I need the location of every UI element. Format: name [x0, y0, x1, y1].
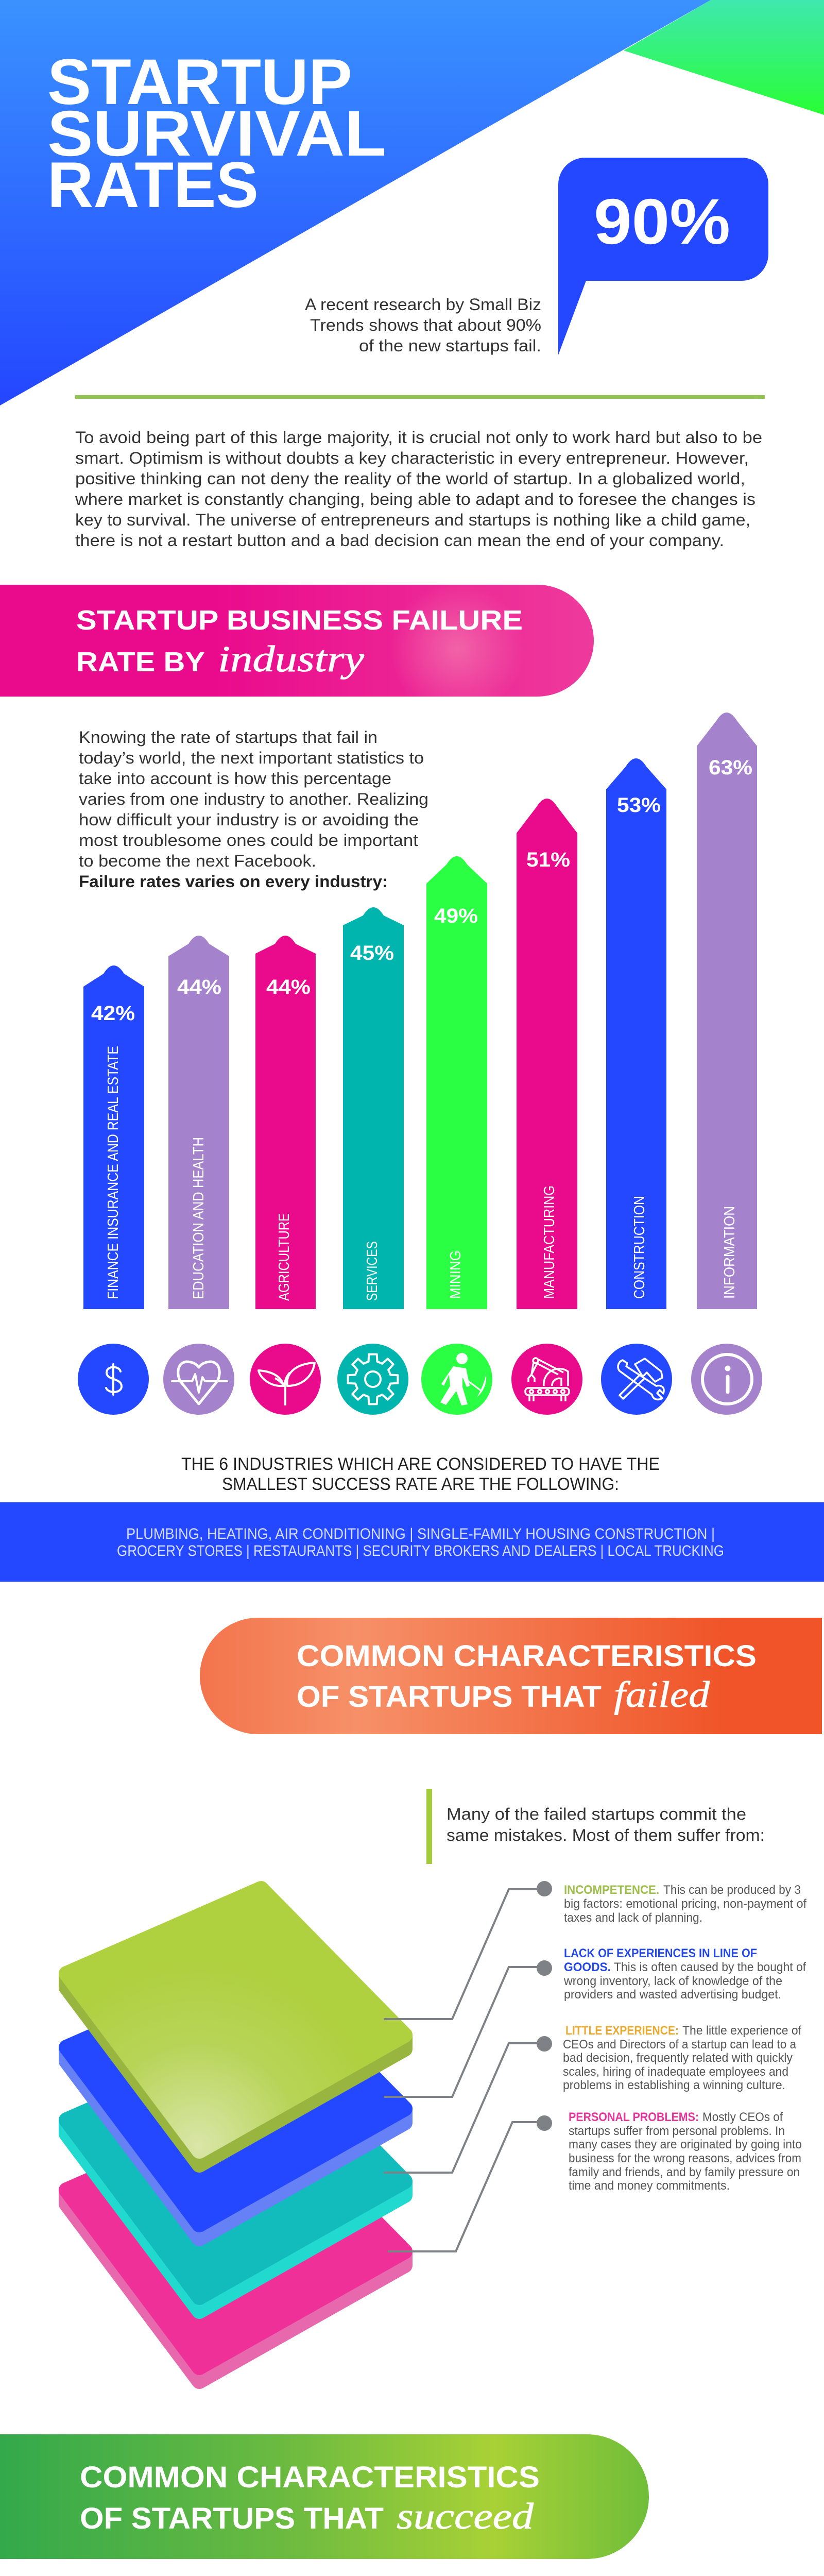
icon: plant: [250, 1344, 321, 1415]
text block: personal problems: time and money commitments.: [569, 2179, 730, 2193]
text block: little experience: bad decision, frequently related with quickly: [563, 2051, 793, 2065]
chart: stacked layers: [66, 1889, 405, 2381]
bar: education and health 44%: 44%: [177, 976, 221, 998]
bar: education and health 44%: EDUCATION AND HEALTH: [191, 1137, 207, 1299]
bar: information 63%: [697, 713, 757, 1309]
callout: 90% speech bubble: 90%: [594, 186, 730, 258]
text block: personal problems: many cases they are originated by going into: [569, 2138, 802, 2151]
panel: industry strip: [0, 1502, 824, 1582]
text block: lack of experience: This is often caused by the bought of: [614, 1960, 806, 1974]
bar: manufacturing 51%: 51%: [526, 849, 570, 871]
text block: failed intro: [426, 1789, 765, 1864]
bar: information 63%: INFORMATION: [722, 1206, 738, 1299]
text block: little experience: LITTLE EXPERIENCE:: [565, 2024, 679, 2038]
bar: finance 42%: FINANCE INSURANCE AND REAL ESTATE: [105, 1046, 122, 1299]
bar: agriculture 44%: AGRICULTURE: [276, 1213, 293, 1301]
bar: construction 53%: 53%: [617, 794, 661, 817]
text block: industry intro: take into account is how this percentage: [79, 769, 391, 788]
text block: incompetence: This can be produced by 3: [663, 1883, 801, 1897]
intro paragraph: there is not a restart button and a bad decision can mean the end of your company.: [75, 531, 724, 550]
layer: teal: [66, 2035, 405, 2311]
bar: mining 49%: 49%: [434, 905, 478, 927]
text block: incompetence: INCOMPETENCE.: [564, 1883, 659, 1897]
text block: lack of experience: [563, 1946, 806, 2002]
icon row: [78, 1344, 762, 1415]
intro paragraph: To avoid being part of this large majority, it is crucial not only to work hard but also to be: [75, 428, 762, 447]
panel: industry strip: PLUMBING, HEATING, AIR CONDITIONING | SINGLE-FAMILY HOUSING CONSTRUCTION |: [126, 1526, 715, 1543]
icon: info: [691, 1344, 762, 1415]
text block: lack of experience: providers and wasted advertising budget.: [564, 1988, 781, 2002]
bar: mining 49%: MINING: [448, 1250, 464, 1299]
layer: pink: [66, 2105, 405, 2381]
callout text: Trends shows that about 90%: [310, 316, 541, 334]
bar: services 45%: SERVICES: [364, 1241, 381, 1301]
callout text: [305, 295, 541, 355]
intro paragraph: key to survival. The universe of entrepreneurs and startups is nothing like a child game,: [75, 511, 750, 529]
text block: personal problems: business for the wrong reasons, advices from: [569, 2151, 801, 2165]
bar: mining 49%: [426, 856, 487, 1309]
intro paragraph: where market is constantly changing, being able to adapt and to foresee the changes is: [75, 490, 756, 509]
heading: failure rate by industry: [0, 585, 594, 697]
text block: personal problems: Mostly CEOs of: [702, 2110, 783, 2124]
text block: little experience: [563, 2024, 801, 2092]
heading: failure rate by industry: industry: [218, 638, 364, 680]
bar: information 63%: 63%: [709, 756, 752, 779]
panel: industry strip: GROCERY STORES | RESTAURANTS | SECURITY BROKERS AND DEALERS | LOCAL TRUCKING: [117, 1543, 724, 1560]
text block: lack of experience: GOODS.: [564, 1960, 611, 1974]
text block: incompetence: taxes and lack of planning.: [564, 1911, 702, 1925]
title: [47, 46, 386, 221]
text block: little experience: problems in establishing a winning culture.: [563, 2078, 785, 2092]
text block: industry intro: Failure rates varies on every industry:: [79, 872, 388, 891]
icon: dollar: [78, 1344, 149, 1415]
bar: manufacturing 51%: [517, 799, 577, 1309]
intro paragraph: [75, 428, 762, 550]
text block: failed intro: Many of the failed startups commit the: [447, 1805, 746, 1823]
text block: industry intro: to become the next Facebook.: [79, 852, 316, 870]
text block: six industries: SMALLEST SUCCESS RATE ARE THE FOLLOWING:: [222, 1475, 619, 1494]
bar: agriculture 44%: 44%: [266, 976, 311, 998]
text block: personal problems: family and friends, and by family pressure on: [569, 2165, 800, 2179]
heading: startups that succeed: OF STARTUPS THAT: [80, 2502, 384, 2535]
callout: 90% speech bubble: [558, 158, 768, 355]
heading: startups that failed: OF STARTUPS THAT: [297, 1680, 602, 1714]
title: RATES: [47, 149, 259, 221]
text block: six industries: THE 6 INDUSTRIES WHICH ARE CONSIDERED TO HAVE THE: [181, 1454, 660, 1474]
heading: startups that succeed: COMMON CHARACTERISTICS: [80, 2461, 540, 2494]
text block: industry intro: [79, 728, 428, 891]
bar: construction 53%: [606, 758, 666, 1309]
hero blue triangle: [0, 0, 711, 405]
intro paragraph: positive thinking can not deny the reality of the world of startup. In a globalized world,: [75, 469, 745, 488]
text block: incompetence: big factors: emotional pricing, non-payment of: [564, 1897, 806, 1911]
heading: startups that succeed: [0, 2434, 649, 2559]
heading: startups that succeed: succeed: [397, 2496, 534, 2537]
text block: little experience: scales, hiring of inadequate employees and: [563, 2065, 788, 2079]
title: STARTUP: [47, 46, 352, 118]
bar: services 45%: 45%: [350, 942, 394, 964]
intro paragraph: smart. Optimism is without doubts a key characteristic in every entrepreneur. However,: [75, 449, 749, 467]
heading: startups that failed: [200, 1618, 822, 1734]
text block: little experience: CEOs and Directors of a startup can lead to a: [563, 2038, 797, 2052]
text block: little experience: The little experience of: [682, 2024, 801, 2038]
text block: personal problems: PERSONAL PROBLEMS:: [569, 2110, 699, 2124]
layer: green: [66, 1889, 405, 2165]
heading: failure rate by industry: RATE BY: [76, 647, 205, 677]
text block: personal problems: startups suffer from personal problems. In: [569, 2124, 785, 2138]
icon: heart pulse: [163, 1344, 234, 1415]
bar: education and health 44%: [168, 936, 229, 1309]
connectors: [384, 1881, 552, 2251]
bar: finance 42%: 42%: [91, 1002, 135, 1025]
text block: failed intro: same mistakes. Most of them suffer from:: [447, 1826, 765, 1844]
heading: startups that failed: failed: [614, 1674, 710, 1715]
text block: six industries: [181, 1454, 660, 1494]
icon: miner: [421, 1344, 492, 1415]
layer: blue: [66, 1962, 405, 2239]
bar chart: failure rates: [83, 713, 757, 1309]
bar: construction 53%: CONSTRUCTION: [631, 1196, 648, 1299]
title: SURVIVAL: [47, 98, 386, 170]
text block: incompetence: [564, 1883, 806, 1925]
text block: industry intro: varies from one industry to another. Realizing: [79, 790, 428, 808]
heading: startups that failed: COMMON CHARACTERISTICS: [297, 1639, 757, 1673]
text block: industry intro: most troublesome ones could be important: [79, 831, 418, 850]
text block: lack of experience: wrong inventory, lack of knowledge of the: [563, 1974, 782, 1988]
icon: factory robot: [511, 1344, 582, 1415]
text block: industry intro: today’s world, the next important statistics to: [79, 749, 424, 767]
text block: industry intro: Knowing the rate of startups that fail in: [79, 728, 377, 747]
callout text: A recent research by Small Biz: [305, 295, 541, 314]
text block: personal problems: [569, 2110, 802, 2193]
callout text: of the new startups fail.: [359, 336, 541, 355]
hero green corner: [624, 0, 824, 115]
bar: manufacturing 51%: MANUFACTURING: [541, 1185, 558, 1299]
heading: failure rate by industry: STARTUP BUSINESS FAILURE: [76, 605, 523, 636]
text block: industry intro: how difficult your industry is or avoiding the: [79, 810, 419, 829]
icon: tools: [601, 1344, 672, 1415]
icon: gear: [337, 1344, 408, 1415]
bar: services 45%: [343, 907, 404, 1309]
bar: agriculture 44%: [255, 936, 316, 1309]
bar: finance 42%: [83, 965, 144, 1309]
text block: lack of experience: LACK OF EXPERIENCES IN LINE OF: [564, 1946, 757, 1960]
